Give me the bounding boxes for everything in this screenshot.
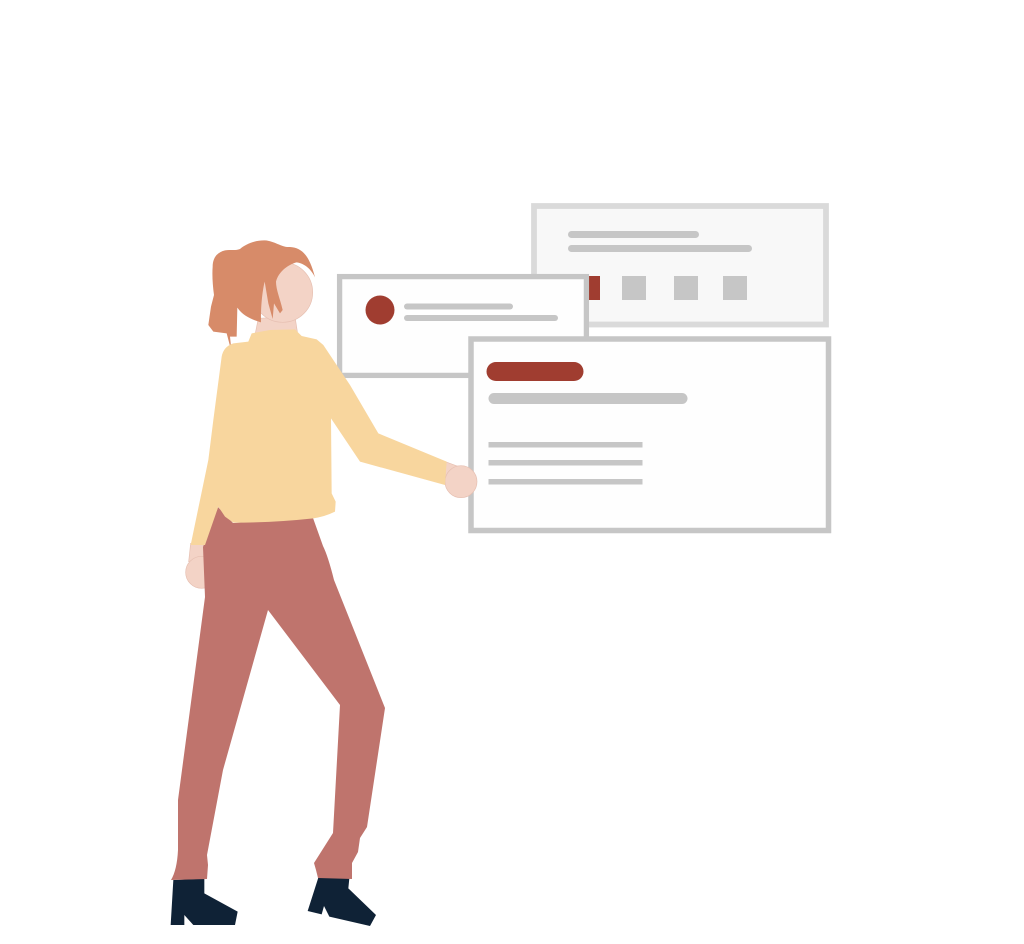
middle card red circle (366, 296, 394, 324)
front card red heading pill (486, 362, 584, 381)
back card text line 2 (568, 245, 752, 252)
figure: woman (171, 240, 477, 926)
front card text lines (488, 442, 642, 484)
back card text line 1 (568, 231, 699, 238)
right shoe (308, 878, 376, 926)
front card grey subheading pill (488, 393, 688, 404)
panel: front card (471, 339, 828, 530)
left shoe (171, 879, 238, 925)
middle card text line 2 (404, 315, 558, 321)
back card grey squares (622, 276, 747, 300)
right hand (445, 462, 477, 498)
left hand (186, 543, 218, 588)
panel: back card (534, 206, 826, 324)
neck (255, 317, 297, 333)
sweater (191, 329, 447, 545)
back card red square (576, 276, 600, 300)
panel: middle card (340, 277, 586, 375)
hair (208, 240, 315, 352)
middle card text line 1 (404, 304, 513, 310)
trousers (171, 507, 385, 880)
head (253, 262, 313, 322)
